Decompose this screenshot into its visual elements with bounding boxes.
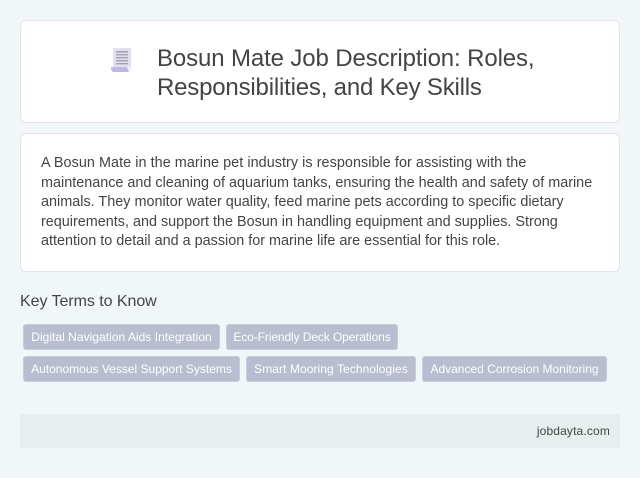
tag: smart mooring: Smart Mooring Technologies [254,362,408,376]
tag: smart mooring [246,356,416,382]
text block: description: animals. They monitor water quality, feed marine pets according to specific dietary [41,194,564,210]
heading: key terms: Key Terms to Know [20,293,157,310]
footer bar [20,414,620,448]
tag: autonomous vessel [23,356,240,382]
tag: digital navigation [23,324,220,350]
tag: digital navigation: Digital Navigation Aids Integration [31,330,212,344]
panel: title card [20,20,620,123]
title: Bosun Mate Job Description: Roles, [157,45,534,72]
text block: description: maintenance and cleaning of aquarium tanks, ensuring the health and safety of marine [41,174,592,190]
footer text: jobdayta.com [537,424,610,438]
text block: description: attention to detail and a passion for marine life are essential for this role. [41,233,500,249]
tag: eco-friendly: Eco-Friendly Deck Operations [233,330,391,344]
text block: description: A Bosun Mate in the marine pet industry is responsible for assisting with the [41,155,526,171]
panel: description card [20,133,620,272]
tag group [23,324,607,382]
tag: eco-friendly [226,324,398,350]
tag: autonomous vessel: Autonomous Vessel Support Systems [31,362,232,376]
title [157,45,534,101]
icon: document scroll [111,48,131,72]
tag: corrosion monitoring: Advanced Corrosion Monitoring [430,362,599,376]
title: Responsibilities, and Key Skills [157,74,482,101]
tag: corrosion monitoring [422,356,607,382]
text block: description [41,155,592,249]
text block: description: requirements, and support the Bosun in handling equipment and supplies. Strong [41,214,558,230]
